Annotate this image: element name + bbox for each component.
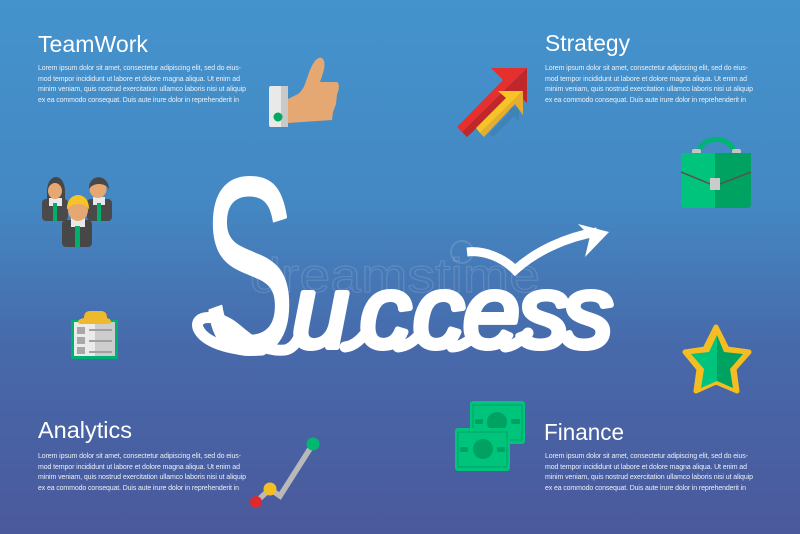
icon: star [685,327,749,391]
body text: strategy: mod tempor incididunt ut labore et dolore magna aliqua. Ut enim ad [545,76,747,83]
letters: uccess: u [292,255,349,369]
body text: strategy: Lorem ipsum dolor sit amet, consectetur adipiscing elit, sed do eius- [545,65,749,72]
body text: finance: Lorem ipsum dolor sit amet, consectetur adipiscing elit, sed do eius- [545,453,749,460]
body text: strategy: minim veniam, quis nostrud exercitation ullamco laboris nisi ut aliquip [545,86,753,93]
letters: uccess: c [360,255,411,369]
body text: analytics: ex ea commodo consequat. Duis aute irure dolor in reprehenderit in [38,485,239,492]
letters: uccess: e [463,255,520,369]
person: woman [42,177,68,221]
letters: uccess: s [562,255,613,369]
letters: uccess: c [413,255,464,369]
letters: uccess: s [518,255,569,369]
body text: strategy: ex ea commodo consequat. Duis aute irure dolor in reprehenderit in [545,97,746,104]
banknote: back [470,401,525,444]
person: blonde front [62,195,92,247]
icon: team of three people [42,177,112,247]
arrow: upward swash [467,224,609,270]
swash: S lower loop and baseline joins [198,318,528,350]
body text: analytics: minim veniam, quis nostrud exercitation ullamco laboris nisi ut aliquip [38,474,246,481]
body text: teamwork: minim veniam, quis nostrud exercitation ullamco laboris nisi ut aliquip [38,86,246,93]
icon: briefcase [681,140,751,208]
panel: analytics [38,417,246,492]
panel: strategy [545,30,753,104]
banknote: front [455,428,510,471]
icon: thumbs up [269,58,339,127]
body text: analytics: mod tempor incididunt ut labore et dolore magna aliqua. Ut enim ad [38,464,240,471]
heading: teamwork: TeamWork [38,31,148,57]
letter: capital S: S [203,125,295,405]
heading: strategy: Strategy [545,30,630,56]
icon: banknotes [455,401,525,471]
body text: finance: minim veniam, quis nostrud exercitation ullamco laboris nisi ut aliquip [545,474,753,481]
central lettering: Success [198,125,613,405]
heading: finance: Finance [544,419,624,445]
heading: analytics: Analytics [38,417,132,443]
body text: teamwork: mod tempor incididunt ut labore et dolore magna aliqua. Ut enim ad [38,76,240,83]
panel: teamwork [38,31,246,104]
icon: clipboard [71,311,118,359]
watermark: dreamstime [250,250,540,303]
body text: finance: mod tempor incididunt ut labore et dolore magna aliqua. Ut enim ad [545,464,747,471]
icon: growth arrows [457,68,527,137]
body text: analytics: Lorem ipsum dolor sit amet, consectetur adipiscing elit, sed do eius- [38,453,242,460]
person: man [87,177,112,221]
body text: teamwork: Lorem ipsum dolor sit amet, consectetur adipiscing elit, sed do eius- [38,65,242,72]
panel: finance [544,419,753,492]
body text: finance: ex ea commodo consequat. Duis aute irure dolor in reprehenderit in [545,485,746,492]
icon: line chart [250,438,320,508]
body text: teamwork: ex ea commodo consequat. Duis aute irure dolor in reprehenderit in [38,97,239,104]
